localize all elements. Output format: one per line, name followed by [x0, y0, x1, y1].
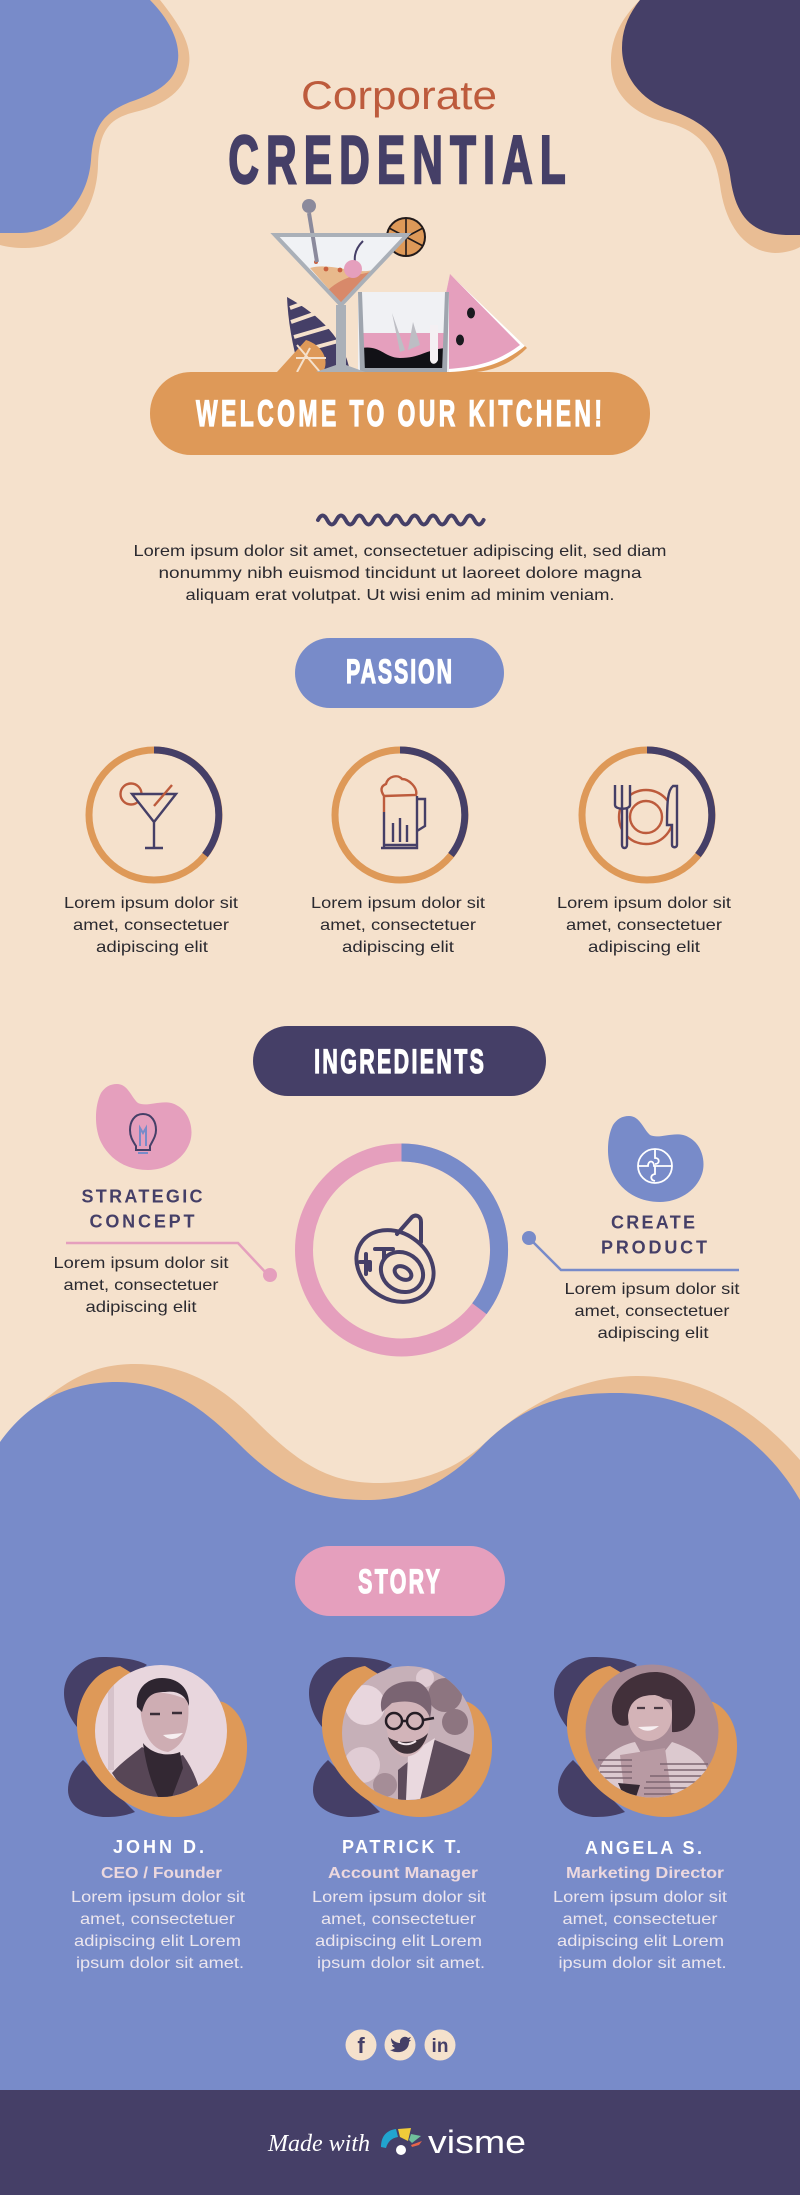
blob with bulb icon	[96, 1084, 192, 1170]
bio: adipiscing elit Lorem	[557, 1933, 724, 1950]
bio: Lorem ipsum dolor sit	[71, 1889, 246, 1906]
icon: orange slice	[277, 340, 326, 372]
bio	[71, 1889, 246, 1972]
caption: amet, consectetuer	[73, 917, 230, 934]
ring chart	[335, 750, 465, 880]
heading: story	[295, 1546, 505, 1616]
banner: welcome	[150, 372, 650, 455]
role: CEO / Founder	[101, 1865, 222, 1882]
intro paragraph: nonummy nibh euismod tincidunt ut laoreet dolore magna	[158, 565, 642, 582]
portrait	[554, 1657, 737, 1817]
name: JOHN D.	[113, 1837, 204, 1857]
bio: amet, consectetuer	[80, 1911, 236, 1928]
icon: cocktail	[120, 784, 176, 848]
connector line	[66, 1243, 277, 1282]
icon: orange wheel garnish	[387, 218, 425, 256]
bio	[312, 1889, 487, 1972]
heading	[82, 1186, 202, 1232]
name: ANGELA S.	[585, 1838, 702, 1858]
name: PATRICK T.	[342, 1837, 461, 1857]
caption: adipiscing elit	[96, 939, 209, 956]
caption: adipiscing elit	[598, 1325, 709, 1342]
caption: amet, consectetuer	[574, 1303, 730, 1320]
portrait	[309, 1657, 492, 1817]
heading: passion	[295, 638, 504, 708]
caption	[564, 1281, 740, 1342]
panel: passion item 1	[64, 750, 239, 956]
panel: create product	[522, 1116, 740, 1342]
icon: visme logo	[381, 2128, 422, 2155]
panel: Angela S.	[553, 1657, 737, 1972]
connector line	[522, 1231, 739, 1270]
icon: linkedin: in	[432, 2036, 448, 2057]
decorative squiggle	[318, 516, 484, 524]
heading: ingredients: INGREDIENTS	[314, 1043, 484, 1081]
caption: Lorem ipsum dolor sit	[557, 895, 732, 912]
caption: Lorem ipsum dolor sit	[54, 1255, 229, 1272]
heading: PRODUCT	[601, 1238, 707, 1258]
blob: top-left corner	[0, 0, 189, 248]
caption	[54, 1255, 229, 1316]
icon: plate and cutlery	[615, 785, 677, 848]
intro paragraph: Lorem ipsum dolor sit amet, consectetuer adipiscing elit, sed diam	[134, 543, 666, 560]
bio: ipsum dolor sit amet.	[558, 1955, 726, 1972]
bio: amet, consectetuer	[321, 1911, 477, 1928]
caption	[311, 895, 486, 956]
panel: Patrick T.	[309, 1657, 492, 1972]
heading: ingredients	[253, 1026, 546, 1096]
heading: STRATEGIC	[82, 1186, 202, 1206]
heading	[601, 1212, 707, 1258]
illustration: cocktails and fruit	[275, 199, 527, 373]
caption: adipiscing elit	[86, 1299, 197, 1316]
bio: Lorem ipsum dolor sit	[312, 1889, 487, 1906]
role: Account Manager	[328, 1865, 478, 1882]
heading: passion: PASSION	[346, 653, 452, 691]
icon: leaf	[287, 297, 350, 372]
title: Corporate	[301, 74, 497, 118]
banner: welcome: WELCOME TO OUR KITCHEN!	[196, 392, 602, 434]
ring chart	[89, 750, 219, 880]
icon: twitter	[384, 2030, 416, 2060]
chart: ingredients ring	[304, 1152, 499, 1348]
bio: adipiscing elit Lorem	[74, 1933, 241, 1950]
panel: passion item 2	[311, 750, 486, 956]
caption	[557, 895, 732, 956]
wave: story background	[0, 1364, 800, 2095]
caption: adipiscing elit	[342, 939, 455, 956]
caption: adipiscing elit	[588, 939, 701, 956]
title	[228, 74, 566, 197]
panel: strategic concept	[54, 1084, 277, 1316]
icon: tumbler glass	[358, 292, 449, 372]
caption: Lorem ipsum dolor sit	[311, 895, 486, 912]
bio	[553, 1889, 728, 1972]
ring chart	[582, 750, 712, 880]
title: CREDENTIAL	[228, 122, 566, 197]
heading: CONCEPT	[90, 1212, 194, 1232]
icon: beer mug	[381, 776, 425, 848]
caption: amet, consectetuer	[64, 1277, 219, 1294]
footer	[0, 2090, 800, 2195]
bio: adipiscing elit Lorem	[315, 1933, 482, 1950]
bio: Lorem ipsum dolor sit	[553, 1889, 728, 1906]
icon: pan with egg	[342, 1215, 448, 1317]
icon: martini glass	[275, 199, 407, 373]
icon: facebook: f	[357, 2033, 365, 2058]
made with: Made with	[267, 2131, 370, 2157]
caption: Lorem ipsum dolor sit	[64, 895, 239, 912]
blob: top-right corner	[611, 0, 800, 253]
caption: Lorem ipsum dolor sit	[564, 1281, 740, 1298]
panel: John D.	[64, 1657, 247, 1972]
panel: passion item 3	[557, 750, 732, 956]
caption: amet, consectetuer	[566, 917, 723, 934]
bio: ipsum dolor sit amet.	[76, 1955, 244, 1972]
bio: ipsum dolor sit amet.	[317, 1955, 485, 1972]
bio: amet, consectetuer	[562, 1911, 718, 1928]
icon: watermelon	[430, 274, 527, 373]
caption	[64, 895, 239, 956]
intro paragraph	[134, 543, 666, 604]
heading: story: STORY	[358, 1563, 440, 1601]
intro paragraph: aliquam erat volutpat. Ut wisi enim ad minim veniam.	[186, 587, 614, 604]
blob with puzzle icon	[608, 1116, 704, 1202]
caption: amet, consectetuer	[320, 917, 477, 934]
heading: CREATE	[611, 1212, 695, 1232]
social icons	[346, 2030, 456, 2060]
portrait	[64, 1657, 247, 1817]
role: Marketing Director	[566, 1865, 724, 1882]
visme wordmark: visme	[428, 2124, 526, 2160]
